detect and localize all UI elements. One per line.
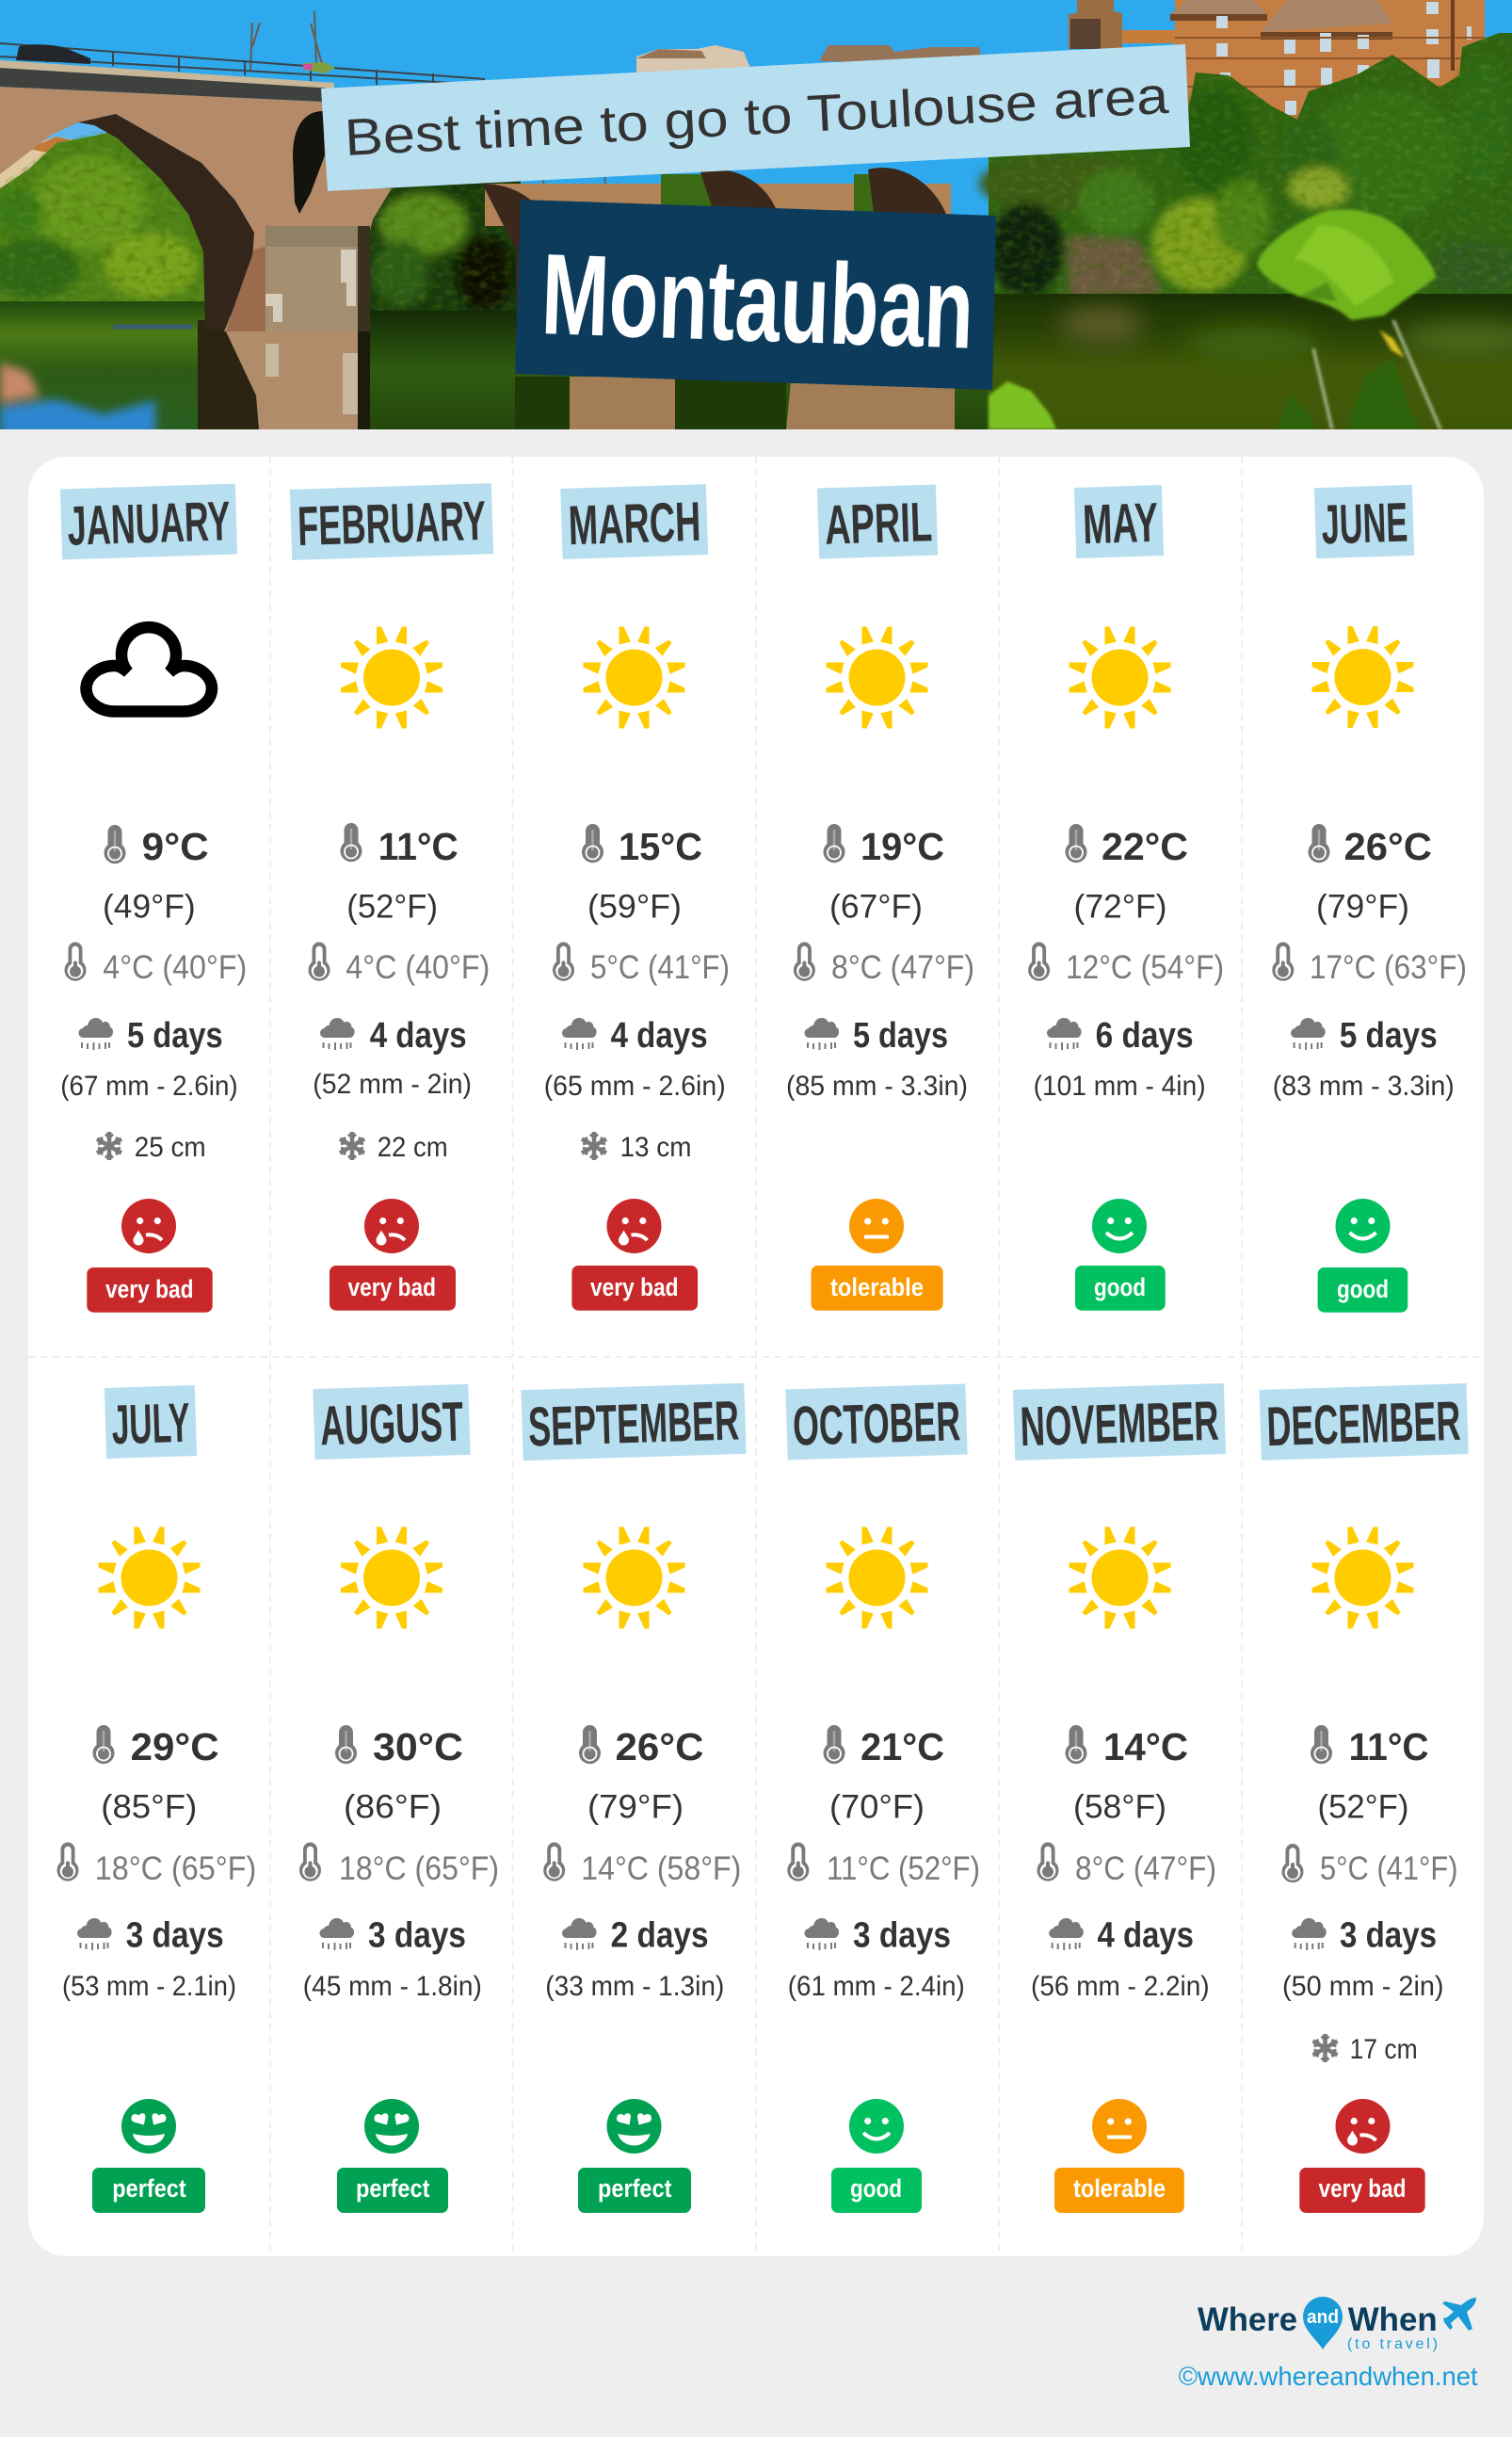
- panel: April: [786, 485, 974, 1311]
- stats: 14°C (58°F): [581, 1850, 741, 1887]
- panel: May: [1028, 485, 1224, 1311]
- stats: [1282, 1725, 1457, 2065]
- stats: (49°F): [103, 889, 196, 925]
- stats: (52 mm - 2in): [313, 1069, 472, 1100]
- copyright: www.whereandwhen.net: ©www.whereandwhen.net: [1179, 2362, 1478, 2391]
- stats: 3 days: [1340, 1915, 1437, 1955]
- stats: 5°C (41°F): [1320, 1850, 1457, 1887]
- month label: [313, 1384, 471, 1460]
- rating: perfect: [578, 2099, 691, 2213]
- stats: (52°F): [1318, 1789, 1408, 1825]
- logo: Where and When (to travel): and: [1307, 2307, 1339, 2328]
- logo: Where and When (to travel): [1198, 2297, 1476, 2352]
- panel: January: [60, 484, 247, 1313]
- stats: (85°F): [101, 1789, 197, 1825]
- right tree mass: [979, 33, 1512, 303]
- month label: JANUARY: [67, 490, 232, 557]
- month label: MAY: [1082, 492, 1159, 556]
- stats: (79°F): [587, 1789, 684, 1825]
- rating: very bad: [1299, 2099, 1425, 2213]
- hero photo: bridge over the river at Montauban: [0, 0, 1512, 438]
- stats: 22 cm: [378, 1132, 448, 1163]
- left tree mass: [0, 132, 218, 305]
- stats: 13 cm: [619, 1132, 691, 1163]
- river water: [0, 294, 1512, 438]
- stats: [786, 824, 974, 1102]
- month label: JUNE: [1321, 492, 1408, 556]
- logo: Where and When (to travel): When: [1348, 2301, 1438, 2338]
- panel: November: [1013, 1383, 1226, 2213]
- rating: perfect: [92, 2099, 205, 2213]
- panel: September: [521, 1383, 747, 2213]
- logo: Where and When (to travel): (to travel): [1347, 2336, 1438, 2352]
- title strip: Montauban: Montauban: [539, 230, 975, 373]
- month label: [290, 483, 493, 560]
- month label: NOVEMBER: [1020, 1390, 1220, 1458]
- stats: [1272, 824, 1467, 1102]
- month label: [1074, 485, 1164, 558]
- stats: 22°C: [1102, 825, 1188, 868]
- logo: Where and When (to travel): Where: [1198, 2301, 1297, 2338]
- month label: [785, 1384, 968, 1460]
- rating: tolerable: [812, 1199, 943, 1311]
- title strip: Montauban: [515, 200, 996, 390]
- rating: good: [831, 2099, 922, 2213]
- rating: good: good: [850, 2174, 902, 2203]
- stats: (58°F): [1073, 1789, 1166, 1825]
- icon: sun: [1312, 626, 1414, 728]
- stats: 5 days: [853, 1016, 948, 1056]
- rating: good: good: [1337, 1275, 1389, 1303]
- heading strip: Best time to go to Toulouse area: [321, 44, 1190, 191]
- panel: February: [290, 483, 493, 1311]
- stats: [543, 1725, 741, 2002]
- icon: airplane: [1442, 2298, 1476, 2331]
- rating: very bad: [330, 1199, 456, 1311]
- stats: 17°C (63°F): [1310, 949, 1467, 986]
- rating: very bad: very bad: [1318, 2174, 1407, 2203]
- rating: perfect: perfect: [598, 2174, 671, 2203]
- stats: 9°C: [142, 825, 209, 868]
- lamp posts: [250, 11, 322, 71]
- month label: FEBRUARY: [297, 490, 487, 557]
- stats: 11°C: [1349, 1725, 1429, 1768]
- stats: 6 days: [1096, 1016, 1194, 1056]
- month label: AUGUST: [319, 1391, 464, 1457]
- rating: tolerable: [1054, 2099, 1184, 2213]
- month label: [60, 484, 237, 559]
- rating: good: [1075, 1199, 1166, 1311]
- rating: very bad: very bad: [348, 1273, 436, 1301]
- stats: 5 days: [127, 1016, 223, 1056]
- stats: 29°C: [131, 1725, 219, 1768]
- stats: 11°C (52°F): [827, 1850, 980, 1887]
- stats: 4 days: [1098, 1915, 1194, 1955]
- stats: 2 days: [611, 1915, 709, 1955]
- stats: 19°C: [861, 825, 944, 868]
- month label: MARCH: [568, 491, 701, 557]
- stats: 8°C (47°F): [1075, 1850, 1216, 1887]
- stats: 17 cm: [1350, 2034, 1418, 2065]
- month label: JULY: [111, 1392, 191, 1456]
- month label: [1314, 485, 1414, 558]
- panel: December: [1260, 1383, 1469, 2213]
- stats: 4°C (40°F): [346, 949, 490, 986]
- month label: [560, 484, 708, 559]
- stats: (45 mm - 1.8in): [303, 1971, 482, 2002]
- month label: APRIL: [824, 491, 933, 557]
- panel: July: [56, 1385, 256, 2213]
- middle tree mass: [370, 179, 521, 315]
- stats: 14°C: [1103, 1725, 1188, 1768]
- stats: 8°C (47°F): [831, 949, 974, 986]
- icon: sun: [1312, 1527, 1414, 1629]
- stats: 15°C: [619, 825, 702, 868]
- rating: very bad: very bad: [105, 1275, 194, 1303]
- stats: [1031, 1725, 1216, 2002]
- icon: cloud: [87, 627, 212, 712]
- stats: 18°C (65°F): [339, 1850, 499, 1887]
- stats: 21°C: [861, 1725, 944, 1768]
- icon: sun: [584, 627, 685, 729]
- stats: 5 days: [1340, 1016, 1438, 1056]
- stats: 3 days: [853, 1915, 951, 1955]
- icon: sun: [341, 1527, 442, 1629]
- rating: good: [1318, 1199, 1407, 1313]
- stats: 3 days: [368, 1915, 466, 1955]
- stats: 26°C: [616, 1725, 704, 1768]
- stats: 3 days: [126, 1915, 224, 1955]
- stats: (86°F): [344, 1789, 442, 1825]
- stats: [544, 824, 730, 1163]
- rating: very bad: very bad: [590, 1273, 678, 1301]
- stats: (79°F): [1316, 889, 1409, 925]
- stats: 5°C (41°F): [590, 949, 730, 986]
- month label: [105, 1385, 197, 1459]
- icon: map pin: [1303, 2297, 1343, 2349]
- foliage texture: [0, 38, 1512, 311]
- house and sky seen through the arch: [0, 118, 107, 188]
- stats: (65 mm - 2.6in): [544, 1071, 726, 1102]
- stats: [1028, 824, 1224, 1102]
- rating: very bad: [571, 1199, 698, 1311]
- bright leaves: [989, 209, 1440, 429]
- rating: tolerable: tolerable: [1073, 2174, 1166, 2203]
- stats: 18°C (65°F): [95, 1850, 256, 1887]
- icon: sun: [98, 1527, 200, 1629]
- panel: March: [544, 484, 730, 1311]
- bridge main arch and pier: [0, 43, 485, 331]
- icon: sun: [1070, 627, 1171, 729]
- bridge arches behind labels: [482, 168, 951, 315]
- stats: (67 mm - 2.6in): [60, 1071, 238, 1102]
- stats: (101 mm - 4in): [1034, 1071, 1206, 1102]
- stats: 25 cm: [135, 1132, 206, 1163]
- stats: (70°F): [829, 1789, 925, 1825]
- month label: [817, 485, 938, 558]
- rating: perfect: perfect: [112, 2174, 186, 2203]
- stats: 12°C (54°F): [1066, 949, 1224, 986]
- rating: perfect: [337, 2099, 448, 2213]
- stats: 4 days: [370, 1016, 467, 1056]
- icon: sun: [341, 627, 442, 729]
- rating: tolerable: tolerable: [830, 1273, 924, 1301]
- stats: 11°C: [378, 825, 458, 868]
- stats: [56, 1725, 256, 2002]
- stats: [309, 823, 490, 1163]
- stats: (33 mm - 1.3in): [545, 1971, 724, 2002]
- stats: 30°C: [373, 1725, 463, 1768]
- month label: SEPTEMBER: [527, 1389, 740, 1459]
- icon: sun: [827, 627, 928, 729]
- stats: (61 mm - 2.4in): [788, 1971, 965, 2002]
- stats: (59°F): [587, 889, 682, 925]
- panel: August: [299, 1384, 499, 2213]
- stats: 4 days: [611, 1016, 708, 1056]
- distant rooftops: [636, 45, 749, 73]
- panel: October: [785, 1384, 980, 2213]
- building: red brick palace: [1069, 0, 1485, 132]
- rating: perfect: perfect: [356, 2174, 429, 2203]
- rating: good: good: [1094, 1273, 1146, 1301]
- white calendar card: [28, 457, 1484, 2256]
- stats: 4°C (40°F): [103, 949, 247, 986]
- stats: (56 mm - 2.2in): [1031, 1971, 1210, 2002]
- stats: (67°F): [829, 889, 923, 925]
- stats: [299, 1725, 499, 2002]
- icon: sun: [1070, 1527, 1171, 1629]
- stats: (53 mm - 2.1in): [62, 1971, 236, 2002]
- stats: (50 mm - 2in): [1282, 1971, 1444, 2002]
- rating: very bad: [87, 1199, 213, 1313]
- month label: [521, 1383, 747, 1461]
- icon: sun: [827, 1527, 928, 1629]
- heading strip: Best time to go to Toulouse area: Best time to go to Toulouse area: [343, 66, 1170, 167]
- stats: (72°F): [1073, 889, 1167, 925]
- month label: OCTOBER: [792, 1390, 961, 1458]
- stats: (85 mm - 3.3in): [786, 1071, 968, 1102]
- stats: (83 mm - 3.3in): [1273, 1071, 1455, 1102]
- stats: (52°F): [346, 889, 438, 925]
- icon: sun: [584, 1527, 685, 1629]
- stats: 26°C: [1344, 825, 1432, 868]
- stats: [787, 1725, 980, 2002]
- month label: [1013, 1383, 1226, 1461]
- panel: June: [1272, 485, 1467, 1313]
- stats: [60, 825, 247, 1163]
